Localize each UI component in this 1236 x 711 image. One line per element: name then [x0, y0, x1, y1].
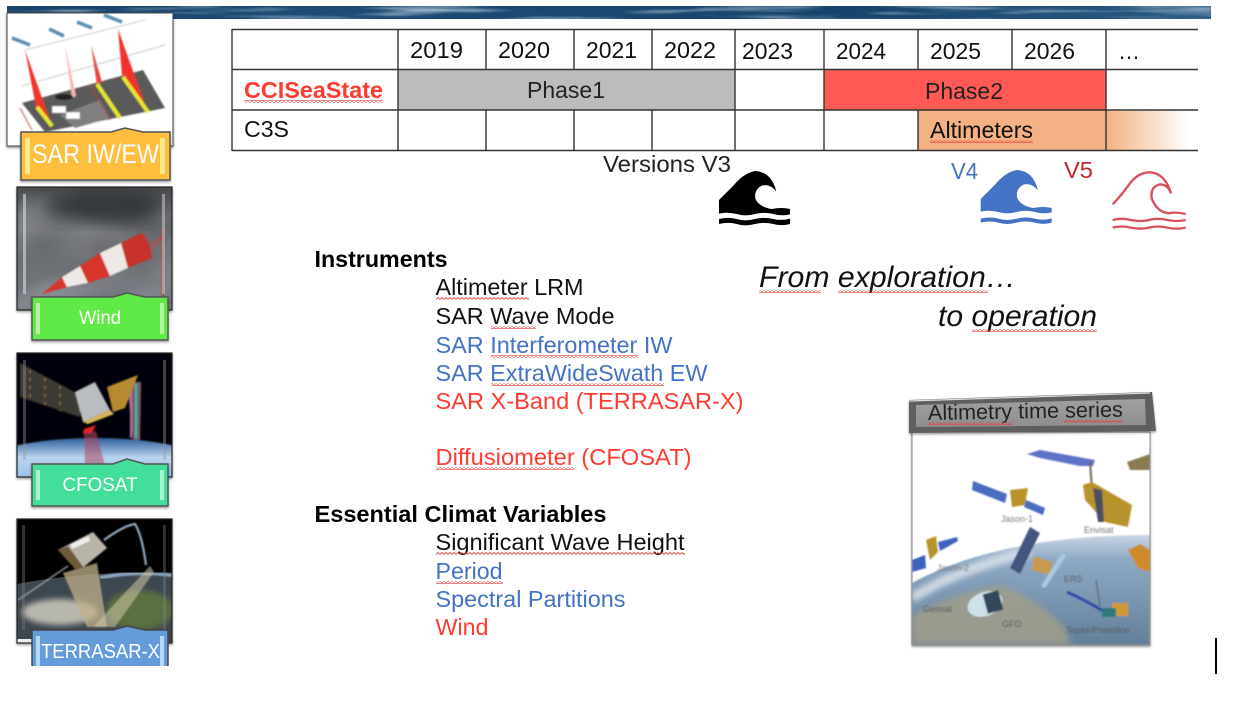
label: Wind: Wind [79, 308, 121, 329]
gfo [966, 590, 1004, 618]
jason-2 [912, 555, 926, 572]
instruments list [436, 274, 744, 470]
altimeters bar [918, 110, 1106, 150]
banner: Altimetry time series [909, 392, 1156, 433]
label: SAR IW/EW: SAR IW/EW [32, 139, 159, 169]
year headers: 2026 [1024, 38, 1075, 64]
row label: C3S: C3S [244, 116, 289, 142]
version label V4: V4 [951, 158, 978, 184]
year headers: 2022 [664, 37, 716, 63]
instruments list: Diffusiometer (CFOSAT) [436, 444, 692, 470]
variables list: Spectral Partitions [436, 586, 626, 612]
label: SAR IW/EW [21, 128, 170, 180]
picture: altimetry satellites over Earth [912, 432, 1150, 645]
small captions: Envisat [1084, 525, 1114, 535]
phase 1 bar [398, 69, 735, 110]
heading: Essential Climat Variables: Essential Climat Variables [314, 501, 606, 527]
label: TERRASAR-X: TERRASAR-X [41, 640, 160, 663]
icon: black wave [719, 171, 790, 225]
instruments list: SAR Interferometer IW [436, 332, 672, 358]
phase 1 text: Phase1 [527, 77, 605, 103]
timeline table [232, 29, 1198, 151]
year headers: 2020 [498, 37, 550, 63]
banner: Altimetry time series: Altimetry time series [928, 398, 1123, 425]
small captions: Geosat [923, 604, 953, 614]
year headers: 2025 [930, 38, 981, 64]
icon: outlined red wave [1113, 172, 1186, 229]
row label: CCISeaState: CCISeaState [244, 77, 383, 103]
tagline: to operation: to operation [938, 300, 1097, 333]
small captions: ERS [1064, 574, 1083, 584]
instruments list: SAR X-Band (TERRASAR-X) [436, 388, 744, 414]
variables list [436, 529, 685, 640]
picture: windsock under a stormy sky [17, 187, 172, 310]
picture: CFOSAT satellite over Earth [14, 352, 174, 481]
variables list: Period [436, 558, 502, 584]
year headers: 2019 [410, 37, 463, 63]
ers [1010, 527, 1040, 574]
year headers: 2021 [586, 37, 637, 63]
phase 2 text: Phase2 [925, 78, 1003, 104]
picture: TerraSAR-X satellite over Earth [17, 519, 174, 643]
year headers: … [1118, 38, 1140, 64]
envisat [1027, 450, 1095, 466]
instruments list: Altimeter LRM [436, 274, 584, 300]
heading: Instruments: Instruments [314, 246, 448, 272]
year headers [410, 37, 1140, 64]
small captions: Jason-2 [937, 563, 969, 573]
topex [1067, 592, 1105, 612]
variables list: Significant Wave Height [436, 529, 685, 555]
small captions: Jason-1 [1001, 514, 1033, 524]
picture: SAR IW/EW geometry diagram [7, 13, 173, 146]
versions label V3: Versions V3 [603, 151, 731, 177]
altimeters continuation fade [1106, 111, 1198, 150]
right edge craft [1127, 454, 1150, 470]
tagline: From exploration: From exploration… [759, 261, 1016, 294]
version label V5: V5 [1064, 157, 1093, 183]
small captions [923, 514, 1130, 635]
instruments list: SAR ExtraWideSwath EW [436, 360, 708, 386]
icon: blue wave [981, 170, 1052, 224]
year headers: 2024 [836, 38, 886, 64]
label: CFOSAT: CFOSAT [62, 475, 138, 496]
label: Wind [32, 293, 168, 340]
text cursor mark [1215, 638, 1217, 674]
small captions: Topex/Poseidon [1066, 625, 1130, 635]
small captions: GFO [1002, 619, 1022, 629]
phase 2 bar [824, 69, 1106, 110]
ocean banner [7, 6, 1211, 19]
label: CFOSAT [32, 459, 168, 506]
variables list: Wind [436, 614, 488, 640]
altimeters text: Altimeters [930, 117, 1033, 143]
year headers: 2023 [742, 38, 793, 64]
label: TERRASAR-X [32, 626, 168, 666]
jason-1 [972, 481, 1007, 503]
instruments list: SAR Wave Mode [436, 303, 614, 329]
